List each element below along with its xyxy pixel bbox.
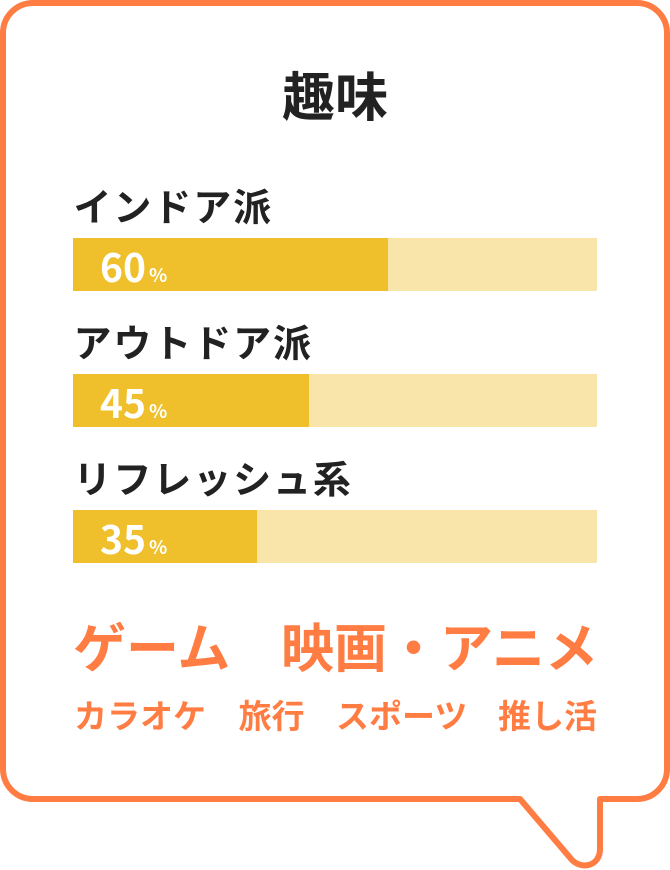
other hobby: sports: スポーツ xyxy=(336,698,467,735)
bar: indoor 60%: 60% xyxy=(100,238,167,294)
label: refresh: リフレッシュ系 xyxy=(74,460,353,502)
bar: indoor 60% xyxy=(73,238,597,291)
label: outdoor: アウトドア派 xyxy=(74,324,313,366)
main hobbies: game: ゲーム xyxy=(73,620,230,679)
label: indoor: インドア派 xyxy=(74,188,273,230)
bar: outdoor 45% xyxy=(73,374,597,427)
main hobbies: movies and anime: 映画・アニメ xyxy=(281,620,598,679)
other hobby: karaoke: カラオケ xyxy=(74,698,206,735)
title: 趣味 xyxy=(282,69,388,128)
bar: refresh 35% xyxy=(73,510,597,563)
bar: refresh 35%: 35% xyxy=(100,510,167,566)
other hobby: oshikatsu: 推し活 xyxy=(498,698,597,735)
other hobby: travel: 旅行 xyxy=(238,698,304,735)
bar: outdoor 45%: 45% xyxy=(100,374,167,430)
